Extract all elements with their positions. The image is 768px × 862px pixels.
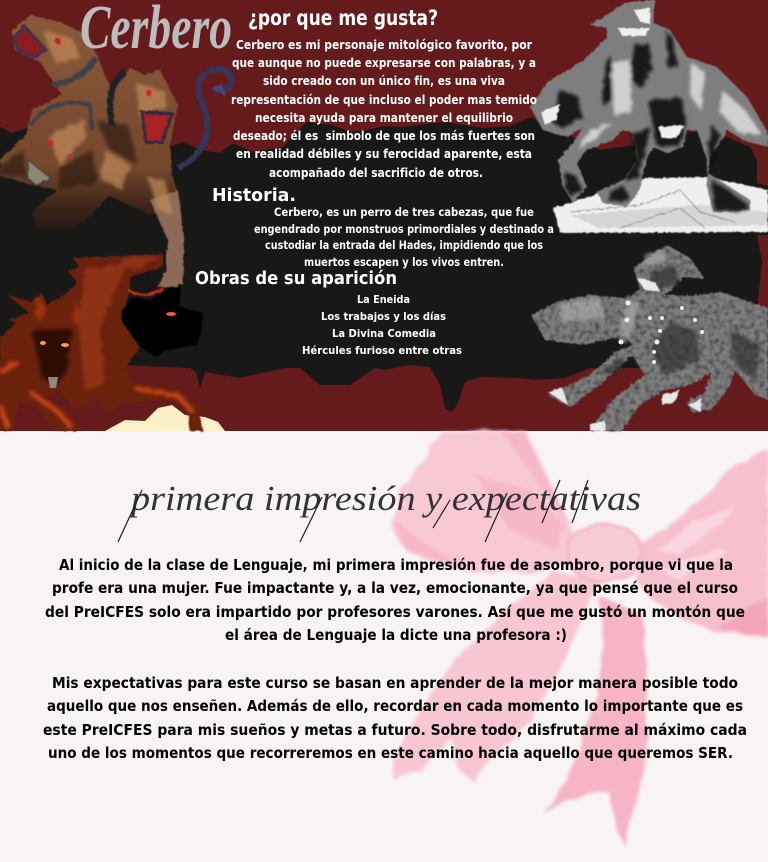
text block: por que me gusta: en realidad débiles y su ferocidad aparente, esta [236, 146, 532, 161]
icon: grey dog lower right [531, 245, 768, 431]
text block: por que me gusta [231, 37, 537, 180]
text block: list of works: La Eneida [357, 293, 410, 306]
text block: first impression [45, 556, 745, 644]
icon: red wolf dog [0, 250, 203, 431]
text block: expectations [43, 674, 747, 762]
text block: por que me gusta: sido creado con un único fin, es una viva [263, 73, 505, 88]
text block: Historia: engendrado por monstruos primordiales y destinado a [254, 222, 554, 236]
text block: por que me gusta: necesita ayuda para mantener el equilibrio [255, 110, 513, 125]
text block: por que me gusta: que aunque no puede expresarse con palabras, y a [232, 55, 536, 70]
icon: pink watercolor ribbon [392, 431, 768, 846]
icon: cream blob [105, 405, 225, 431]
text block: por que me gusta: Cerbero es mi personaje mitológico favorito, por [236, 37, 533, 52]
panel: paper background [0, 431, 768, 862]
text block: Historia: Cerbero, es un perro de tres cabezas, que fue [274, 205, 534, 219]
heading: por que me gusta: ¿por que me gusta? [248, 6, 438, 30]
heading: Historia: Historia. [212, 185, 296, 206]
heading: primera impresion y expectativas [118, 479, 641, 542]
heading: Obras de su aparicion: Obras de su aparición [195, 268, 397, 289]
text block: por que me gusta: representación de que incluso el poder mas temido [231, 92, 537, 107]
text block: list of works: Hércules furioso entre otras [302, 344, 462, 357]
text block: first impression: el área de Lenguaje la dicte una profesora :) [225, 626, 567, 644]
panel: Cerbero dark background [0, 0, 768, 431]
icon: rock [553, 177, 768, 233]
text block: Historia [254, 205, 554, 269]
heading: primera impresion y expectativas: primera impresión y expectativas [128, 479, 641, 518]
text block: Historia: muertos escapen y los vivos entren. [304, 255, 504, 269]
text block: list of works: Los trabajos y los días [321, 310, 446, 323]
text block: list of works: La Divina Comedia [332, 327, 436, 340]
text block: por que me gusta: deseado; él es simbolo de que los más fuertes son [233, 128, 535, 143]
icon: grey three-headed dog [530, 0, 768, 212]
text block: por que me gusta: acompañado del sacrificio de otros. [269, 165, 483, 180]
icon: brown three-headed dog [0, 15, 231, 287]
text block: list of works [302, 293, 462, 357]
text block: Historia: custodiar la entrada del Hades, impidiendo que los [265, 238, 543, 252]
